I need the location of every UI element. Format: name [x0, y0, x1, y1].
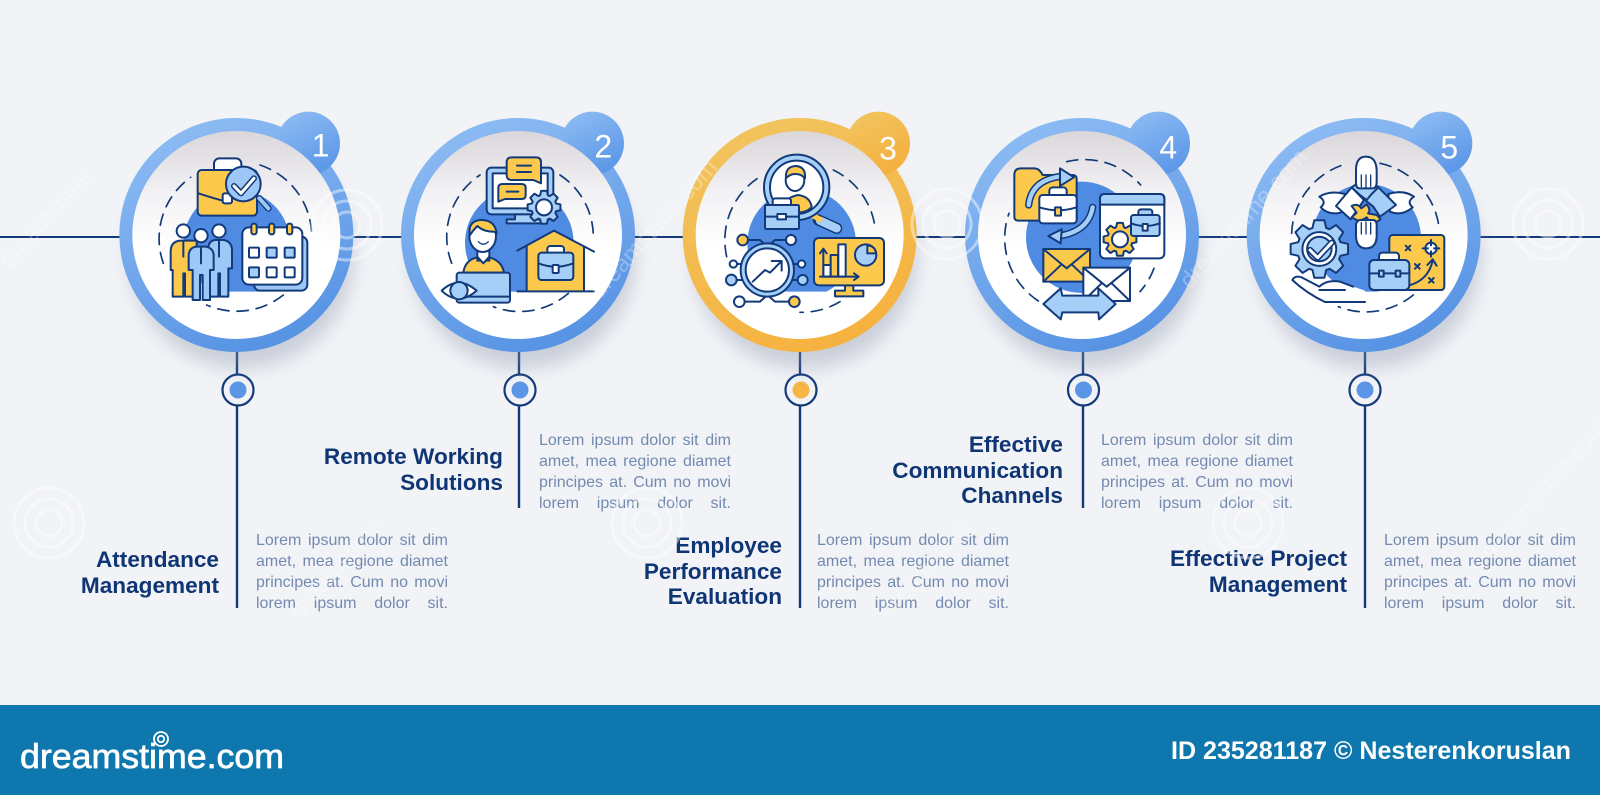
text block 3: amet, mea regione diamet — [817, 553, 1009, 570]
title: employee performance evaluation: Evaluation — [668, 584, 782, 609]
number 1: 1 — [312, 128, 330, 164]
watermark overlay: dreamstime — [874, 513, 978, 624]
text block 5: amet, mea regione diamet — [1384, 553, 1576, 570]
text block 2: lorem ipsum dolor sit. — [539, 495, 731, 512]
watermark overlay: dreamstime.com — [1174, 144, 1313, 294]
icon: remote working — [442, 157, 594, 312]
circle 3: employee performance evaluation — [683, 112, 917, 368]
text block 3: Lorem ipsum dolor sit dim — [817, 532, 1009, 549]
icon: attendance — [159, 158, 312, 311]
step 1 stem and node — [222, 350, 254, 608]
text block 2: principes at. Cum no movi — [539, 474, 731, 491]
inner disc 1 — [132, 131, 340, 339]
badge 3 — [847, 112, 910, 175]
title: remote working solutions: Solutions — [400, 470, 503, 494]
text block 1: principes at. Cum no movi — [256, 574, 448, 591]
footer logo spiral — [154, 732, 168, 746]
title: effective communication channels — [892, 432, 1063, 508]
icon: project management — [1291, 157, 1444, 312]
footer banner — [0, 705, 1600, 795]
ring 4 — [965, 118, 1199, 352]
badge 5 — [1409, 112, 1472, 175]
step 2 stem and node — [504, 350, 536, 508]
text block 2 — [539, 432, 731, 512]
text block 2: amet, mea regione diamet — [539, 453, 731, 470]
text block 1: amet, mea regione diamet — [256, 553, 448, 570]
text block 4: principes at. Cum no movi — [1101, 474, 1293, 491]
badge 4 — [1127, 112, 1190, 175]
title: employee performance evaluation — [644, 533, 782, 609]
text block 3: lorem ipsum dolor sit. — [817, 595, 1009, 612]
title: remote working solutions — [324, 444, 503, 494]
number 3: 3 — [879, 130, 897, 166]
inner disc 2 — [414, 131, 622, 339]
ring 5 — [1247, 118, 1481, 352]
timeline: horizontal line — [0, 236, 1600, 238]
title: attendance management: Management — [81, 572, 219, 598]
text block 5: lorem ipsum dolor sit. — [1384, 595, 1576, 612]
number 4: 4 — [1159, 129, 1177, 165]
text block 4: amet, mea regione diamet — [1101, 453, 1293, 470]
title: remote working solutions: Remote Working — [324, 444, 503, 469]
number 5: 5 — [1440, 129, 1458, 165]
text block 5: Lorem ipsum dolor sit dim — [1384, 532, 1576, 549]
circle 1: attendance management — [119, 112, 353, 368]
text block 1: lorem ipsum dolor sit. — [256, 595, 448, 612]
ring 1 — [119, 118, 353, 352]
circle 5: effective project management — [1247, 112, 1481, 368]
title: effective communication channels: Communication — [892, 458, 1063, 482]
inner disc 3 — [696, 131, 904, 339]
badge 1 — [277, 112, 340, 175]
text block 3: principes at. Cum no movi — [817, 574, 1009, 591]
watermark overlay: dreamstime — [284, 513, 388, 624]
number 2: 2 — [594, 128, 612, 164]
text block 5: principes at. Cum no movi — [1384, 574, 1576, 591]
title: employee performance evaluation: Performance — [644, 558, 782, 584]
watermark overlay: dreamstime.com — [584, 154, 723, 304]
ring 3 — [683, 118, 917, 352]
title: effective project management — [1170, 546, 1347, 596]
title: effective project management: Management — [1209, 572, 1347, 596]
title: effective communication channels: Effective — [969, 432, 1063, 457]
text block 4: Lorem ipsum dolor sit dim — [1101, 432, 1293, 449]
badge 2 — [561, 112, 624, 175]
title: attendance management — [81, 547, 219, 598]
text block 5 — [1384, 532, 1576, 612]
circle 4: effective communication channels — [965, 112, 1199, 368]
icon: communication — [1005, 160, 1164, 319]
text block 2: Lorem ipsum dolor sit dim — [539, 432, 731, 449]
title: effective communication channels: Channels — [961, 483, 1063, 508]
text block 3 — [817, 532, 1009, 612]
title: attendance management: Attendance — [96, 547, 219, 572]
inner disc 5 — [1260, 131, 1468, 339]
inner disc 4 — [978, 131, 1186, 339]
ring 2 — [401, 118, 635, 352]
step 5 stem and node — [1350, 350, 1380, 608]
text block 1: Lorem ipsum dolor sit dim — [256, 532, 448, 549]
step 4 stem and node — [1068, 350, 1099, 508]
circle 2: remote working — [401, 112, 635, 368]
title: employee performance evaluation: Employee — [675, 533, 782, 558]
step 3 stem and node — [786, 350, 816, 608]
footer credit: ID 235281187 © Nesterenkoruslan — [1171, 737, 1571, 765]
text block 4 — [1101, 432, 1293, 512]
text block 1 — [256, 532, 448, 612]
text block 4: lorem ipsum dolor sit. — [1101, 495, 1293, 512]
icon: performance — [725, 155, 884, 312]
footer logo wordmark: dreamstime.com — [20, 738, 284, 776]
title: effective project management: Effective Project — [1170, 546, 1347, 571]
